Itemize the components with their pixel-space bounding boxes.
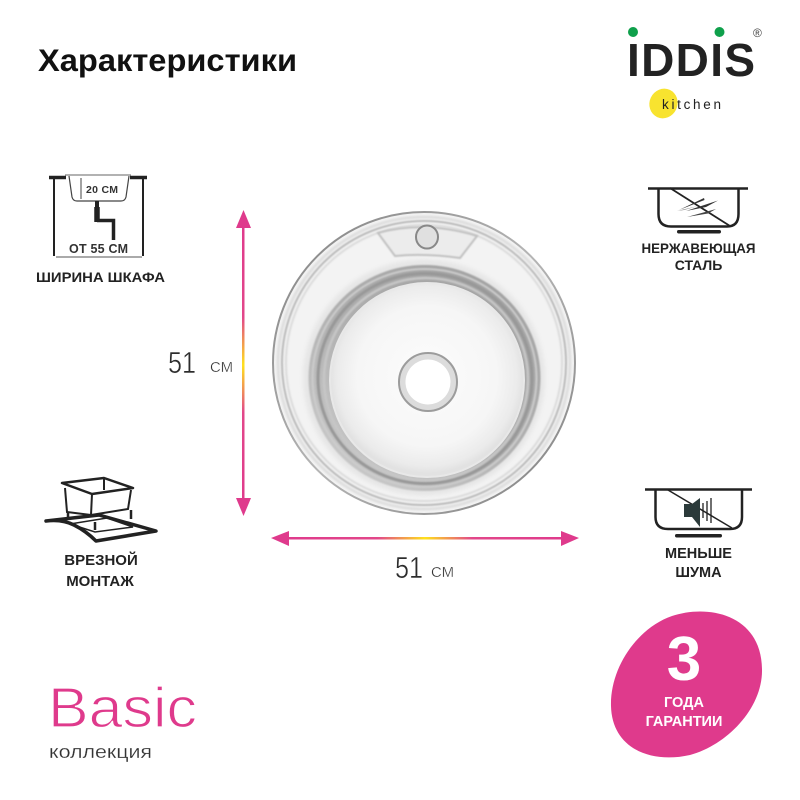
collection name: Basic <box>48 676 197 740</box>
horizontal dimension arrow <box>271 531 579 546</box>
vertical dimension arrow <box>236 210 251 516</box>
icon: drop-in mounting <box>46 478 156 541</box>
collection caption: коллекция <box>49 741 152 762</box>
icon: cabinet width: ОТ 55 СМ <box>69 242 128 256</box>
icon: cabinet width: 20 СМ <box>86 184 118 196</box>
tap ledge <box>378 226 477 258</box>
icon: less noise <box>645 490 752 538</box>
warranty badge: ГОДА <box>664 695 704 711</box>
label: drop-in mounting: ВРЕЗНОЙ <box>64 551 138 569</box>
label: less noise: МЕНЬШЕ <box>665 546 732 562</box>
bowl floor <box>330 283 524 477</box>
horizontal dimension label: 51 <box>395 550 423 585</box>
logo: IDDIS kitchen: kitchen <box>662 97 721 112</box>
warranty badge: ГАРАНТИИ <box>646 714 722 730</box>
logo: IDDIS kitchen: IDDIS <box>627 34 755 86</box>
warranty badge: 3 <box>667 625 701 694</box>
label: stainless steel: НЕРЖАВЕЮЩАЯ <box>642 240 756 256</box>
horizontal dimension label: СМ <box>431 564 454 581</box>
label: stainless steel: СТАЛЬ <box>675 257 722 273</box>
vertical dimension label: СМ <box>210 359 233 376</box>
vertical dimension label <box>168 345 233 380</box>
label: drop-in mounting: МОНТАЖ <box>66 573 134 590</box>
title: Характеристики <box>38 42 297 78</box>
sink illustration <box>273 212 575 514</box>
icon: stainless steel <box>648 188 748 234</box>
warranty badge <box>611 611 762 757</box>
icon: cabinet width <box>49 175 147 257</box>
bowl wall <box>303 260 545 496</box>
logo: IDDIS kitchen: ® <box>753 26 762 40</box>
label: cabinet width: ШИРИНА ШКАФА <box>36 269 165 285</box>
logo: IDDIS kitchen <box>627 26 762 123</box>
label: less noise: ШУМА <box>675 565 722 581</box>
drain <box>399 353 457 411</box>
horizontal dimension label <box>395 550 454 585</box>
vertical dimension label: 51 <box>168 345 196 380</box>
